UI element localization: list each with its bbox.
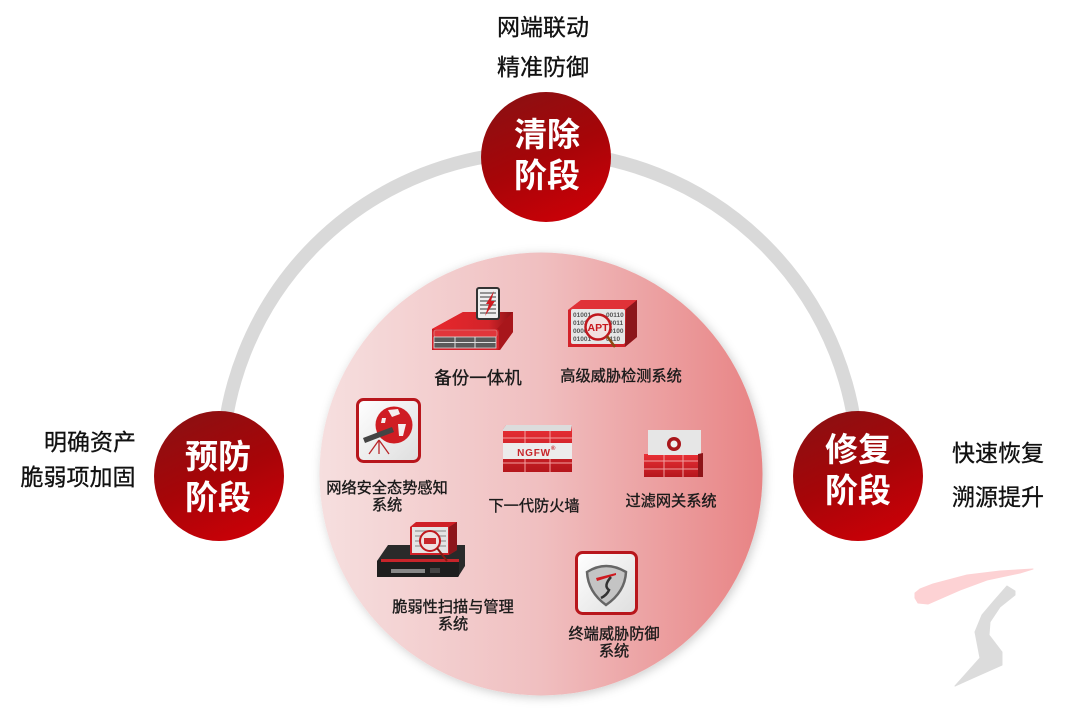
stage node: prevent: 预防 bbox=[185, 438, 251, 475]
label: situational awareness: 系统 bbox=[372, 497, 402, 514]
icon: APT detection: 0101 bbox=[573, 320, 588, 327]
icon: backup appliance bbox=[432, 288, 513, 350]
label: situational awareness bbox=[326, 479, 448, 514]
icon: endpoint defence bbox=[576, 552, 636, 614]
label: situational awareness: 网络安全态势感知 bbox=[326, 479, 448, 497]
icon: NGFW: NGFW bbox=[517, 448, 551, 459]
right caption bbox=[952, 440, 1044, 510]
icon: APT detection: 0011 bbox=[609, 320, 623, 327]
top caption: 精准防御 bbox=[497, 54, 589, 80]
stage node: prevent bbox=[154, 411, 284, 541]
right caption: 溯源提升 bbox=[952, 484, 1044, 510]
stage node: clear: 阶段 bbox=[514, 157, 580, 194]
watermark logo bbox=[915, 569, 1033, 686]
icon: filter gateway bbox=[644, 430, 703, 477]
icon: APT detection: 0110 bbox=[606, 336, 620, 343]
stage node: repair bbox=[793, 411, 923, 541]
label: endpoint defence: 终端威胁防御 bbox=[568, 626, 660, 643]
icon: NGFW: ® bbox=[551, 445, 556, 452]
stage node: repair: 阶段 bbox=[825, 472, 891, 509]
label: backup appliance: 备份一体机 bbox=[434, 368, 522, 388]
label: endpoint defence bbox=[568, 626, 660, 660]
central products circle bbox=[320, 252, 762, 696]
icon: vulnerability scanner bbox=[377, 522, 465, 577]
grey arc bbox=[222, 152, 858, 470]
icon: NGFW bbox=[503, 425, 572, 472]
label: APT detection: 高级威胁检测系统 bbox=[560, 368, 682, 385]
top caption: 网端联动 bbox=[497, 14, 589, 40]
icon: APT detection: 01001 bbox=[573, 312, 591, 319]
icon: APT detection: 0100 bbox=[609, 328, 624, 335]
icon: APT detection: 00110 bbox=[606, 312, 624, 319]
icon: APT detection bbox=[568, 300, 637, 347]
label: vulnerability scanner bbox=[392, 598, 514, 633]
top caption bbox=[497, 14, 589, 80]
icon: situational awareness bbox=[358, 400, 420, 462]
icon: APT detection: 0000 bbox=[573, 328, 588, 335]
stage node: repair: 修复 bbox=[825, 431, 891, 468]
stage node: clear bbox=[481, 92, 611, 222]
label: NGFW: 下一代防火墙 bbox=[488, 498, 580, 515]
left caption: 明确资产 bbox=[44, 429, 136, 455]
left caption: 脆弱项加固 bbox=[20, 464, 136, 490]
left caption bbox=[20, 429, 136, 490]
icon: APT detection: 01001 bbox=[573, 336, 591, 343]
label: vulnerability scanner: 系统 bbox=[438, 616, 468, 633]
icon: APT detection: APT bbox=[588, 322, 609, 334]
label: vulnerability scanner: 脆弱性扫描与管理 bbox=[392, 598, 514, 616]
right caption: 快速恢复 bbox=[952, 440, 1044, 466]
stage node: clear: 清除 bbox=[514, 116, 580, 153]
stage node: prevent: 阶段 bbox=[185, 479, 251, 516]
label: endpoint defence: 系统 bbox=[599, 643, 629, 660]
label: filter gateway: 过滤网关系统 bbox=[625, 493, 717, 510]
